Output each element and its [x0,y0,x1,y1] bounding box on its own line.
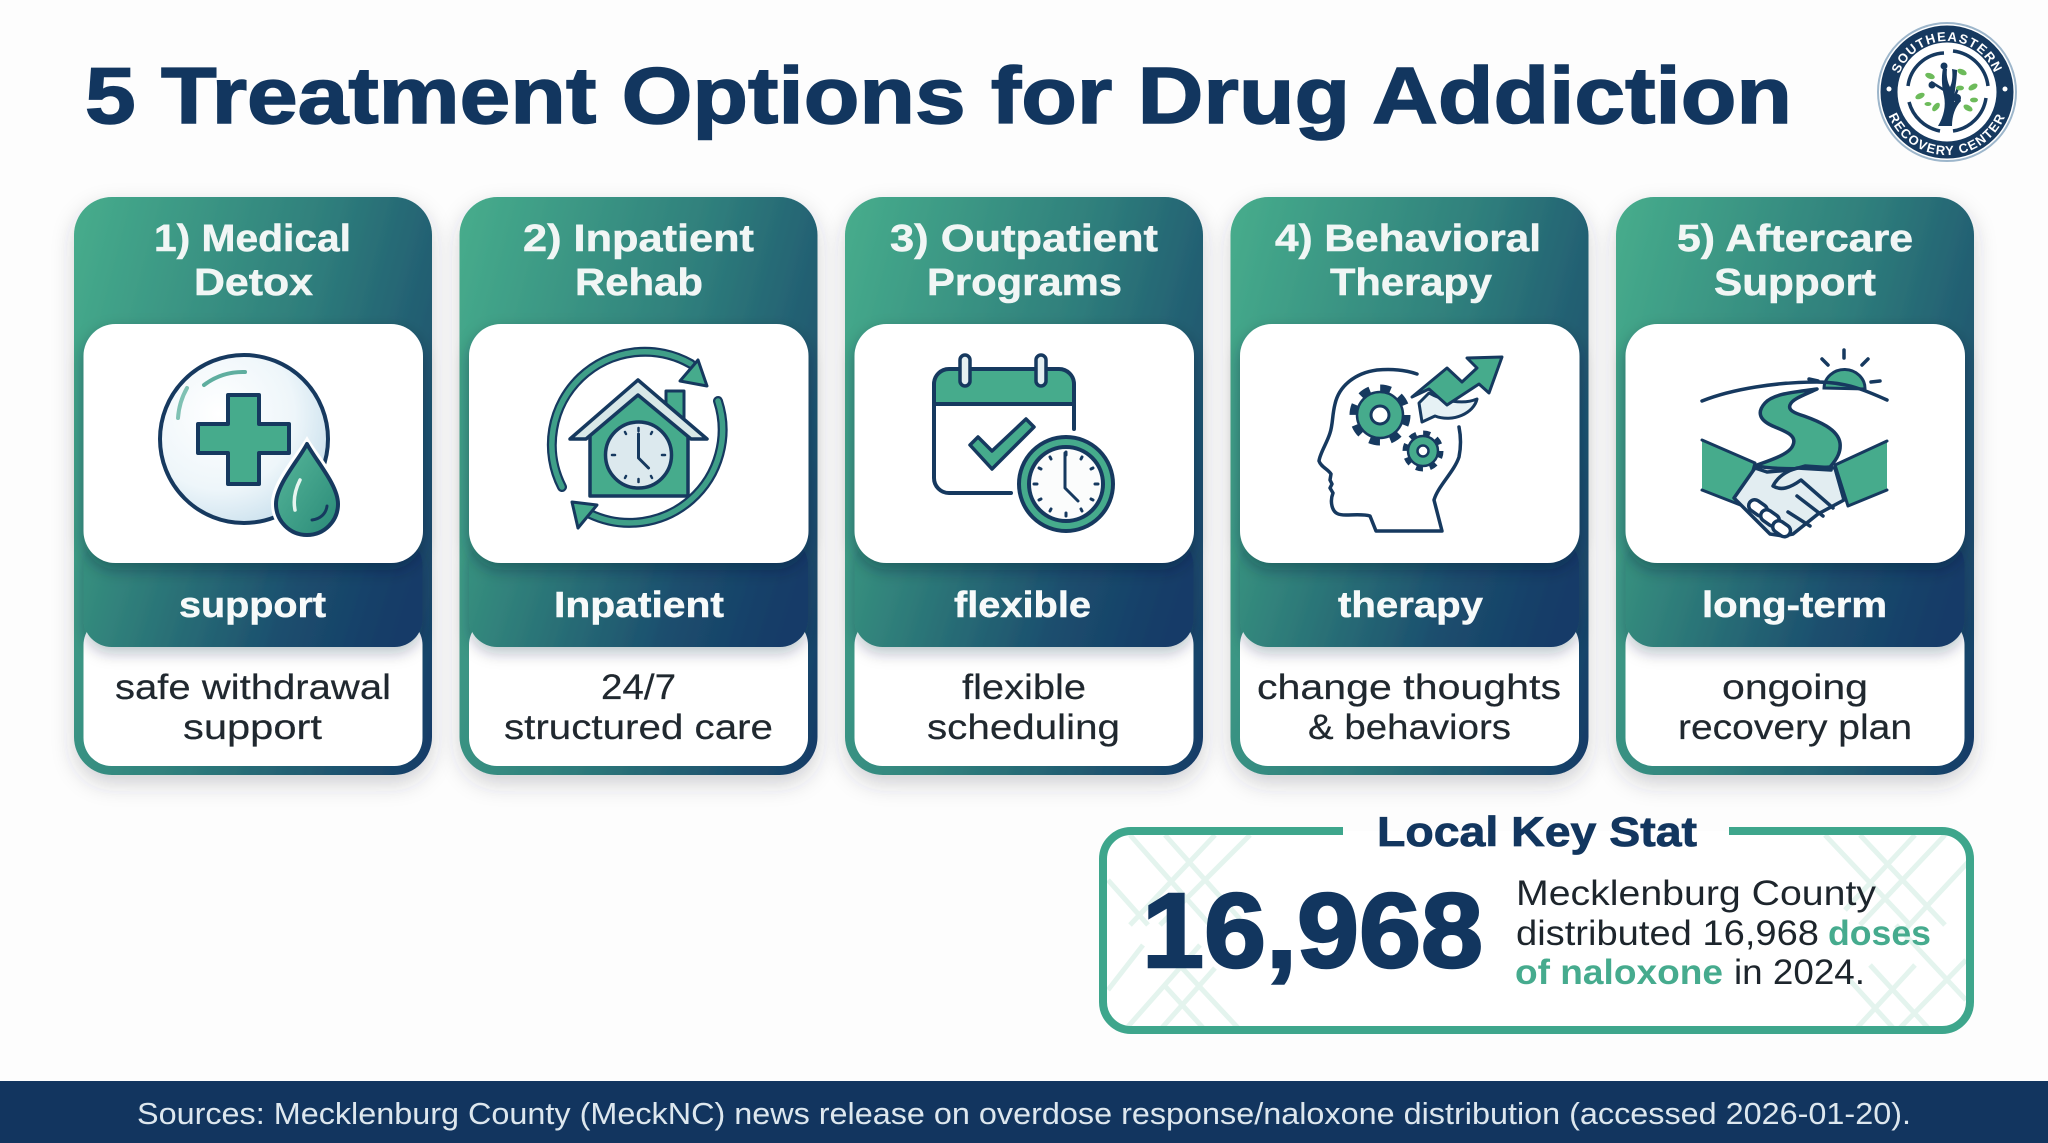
card 2 description: 24/7 [601,668,676,707]
footer bar with sources: Sources: Mecklenburg County (MeckNC) news release on overdose response/naloxone distribution (accessed 2026-01-20). [137,1096,1911,1131]
card 4 description: change thoughts [1257,668,1561,707]
card 1 description: safe withdrawal [115,668,391,707]
card 5 heading: Support [1714,262,1876,304]
card 3 heading: 3) Outpatient [890,218,1158,260]
logo: Southeastern Recovery Center [1877,22,2017,162]
card 4 heading [1275,218,1541,304]
stat description: Mecklenburg County [1516,874,1877,913]
stat description: in 2024. [1734,953,1865,992]
stat description [1515,874,1931,992]
card 2 description [504,668,773,747]
card 2: Inpatient Rehab [460,197,818,775]
card 4 heading: 4) Behavioral [1275,218,1541,260]
card 5 description: ongoing [1722,668,1868,707]
icon: medical cross in bubble with drop [160,355,343,540]
card 1 heading [154,218,351,304]
card 1 description: support [183,708,322,747]
card 3 description: flexible [962,668,1086,707]
card 2 tag: Inpatient [554,584,724,625]
footer bar with sources [0,1081,2048,1143]
card 5 heading: 5) Aftercare [1677,218,1913,260]
card 4 heading: Therapy [1330,262,1492,304]
card 4 description [1257,668,1561,747]
card 3 tag: flexible [954,584,1091,625]
card 2 heading: Rehab [575,262,703,304]
card 5 heading [1677,218,1913,304]
card 5 description [1678,668,1912,747]
card 5 shell [1616,197,1974,775]
big number: 16,968 [1142,872,1483,990]
card 3 heading [890,218,1158,304]
card 1 tag: support [179,584,326,625]
card 3: Outpatient Programs [845,197,1203,775]
card 2 heading [523,218,754,304]
stat description: doses [1828,914,1931,953]
card 3 description: scheduling [927,708,1120,747]
panel: local key stat [1103,808,1970,1032]
card 1 heading: 1) Medical [154,218,351,260]
icon: head with gears and rising arrow [1319,357,1502,531]
card 2 shell [460,197,818,775]
card 1 shell [74,197,432,775]
card 3 shell [845,197,1203,775]
logo: Southeastern Recovery Center: RECOVERY CENTER [1888,112,2005,156]
card 5: Aftercare Support [1616,197,1974,775]
card 3 heading: Programs [927,262,1122,304]
icon: sunrise path and handshake [1702,350,1887,539]
stat description: of naloxone [1515,953,1723,992]
card 2 heading: 2) Inpatient [523,218,754,260]
card 5 description: recovery plan [1678,708,1912,747]
title: 5 Treatment Options for Drug Addiction [85,51,1792,140]
card 4 shell [1230,197,1588,775]
icon: house with clock and circular arrows [552,352,723,528]
stat description: distributed 16,968 [1516,914,1819,953]
card 1: Medical Detox [74,197,432,775]
logo: Southeastern Recovery Center: SOUTHEASTERN [1892,32,2002,73]
stat heading: Local Key Stat [1377,808,1697,855]
card 1 heading: Detox [194,262,313,304]
card 4 description: & behaviors [1308,708,1511,747]
icon: calendar with check and clock [934,355,1113,531]
card 4 tag: therapy [1338,584,1483,625]
card 5 tag: long-term [1702,584,1887,625]
card 1 description [115,668,391,747]
card 3 description [927,668,1120,747]
card 4: Behavioral Therapy [1230,197,1588,775]
card 2 description: structured care [504,708,773,747]
